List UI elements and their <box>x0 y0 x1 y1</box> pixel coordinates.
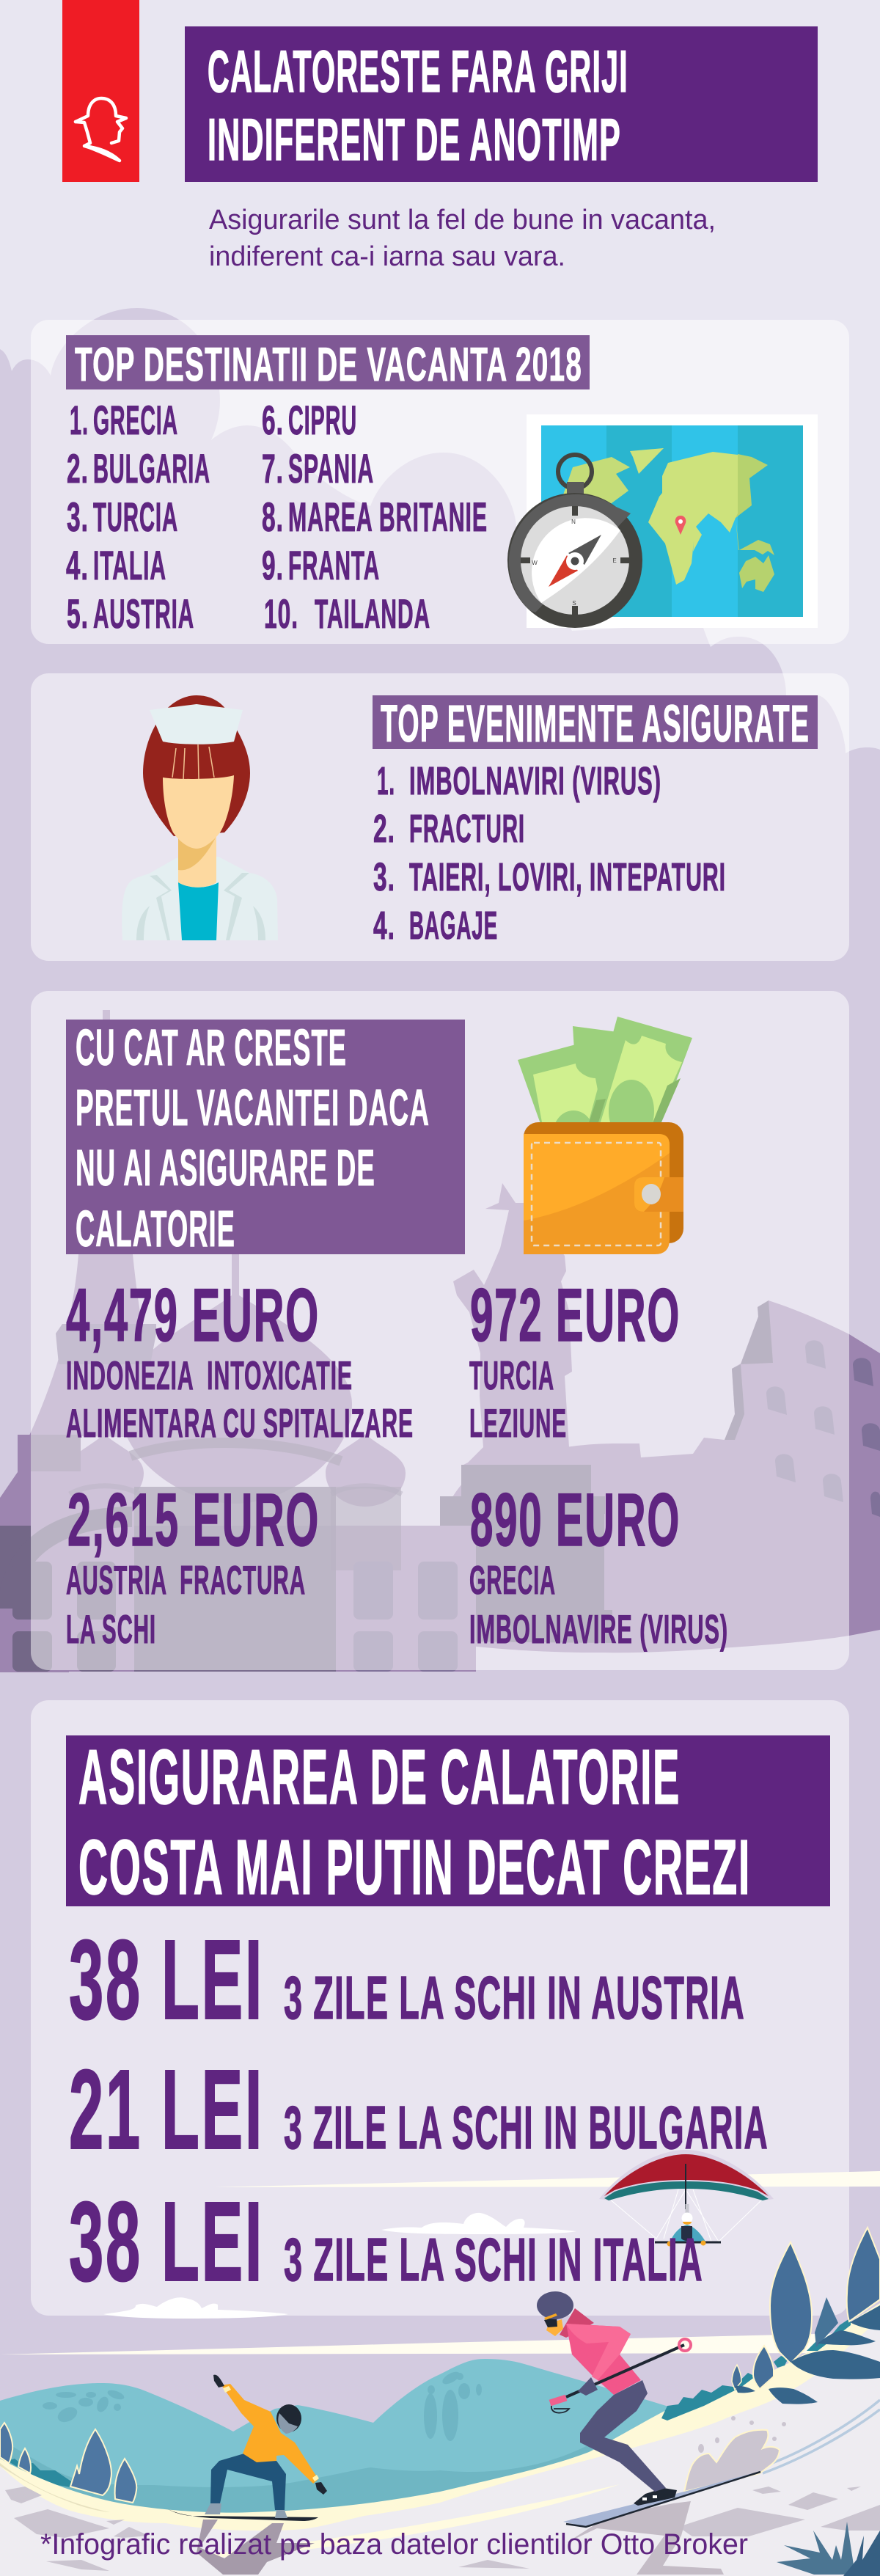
list: destinatii column 2: SPANIA <box>288 445 374 491</box>
ground patches <box>5 2487 880 2571</box>
list: destinatii column 1: 2. <box>67 445 89 491</box>
agave plant <box>777 2522 880 2576</box>
city silhouettes: Moscow, Liberty, Colosseum <box>0 1010 880 1672</box>
heading: cu cat ar creste: CALATORIE <box>76 1200 235 1257</box>
icon: compass: N <box>571 519 576 525</box>
price row: italia <box>69 2178 703 2305</box>
list: destinatii column 1: AUSTRIA <box>93 590 194 637</box>
list: evenimente: BAGAJE <box>409 904 498 948</box>
list: destinatii column 2: 9. <box>262 542 284 588</box>
heading: asigurarea de calatorie <box>66 1734 830 1911</box>
list: destinatii column 1: 1. <box>70 397 89 443</box>
silhouette: cathedral <box>0 1010 476 1672</box>
shadow: snowboarder <box>197 2520 315 2575</box>
figure: hang glider <box>599 2150 774 2246</box>
icon: man with hat logo <box>76 98 126 161</box>
heading: cu cat ar creste: CU CAT AR CRESTE <box>76 1019 347 1076</box>
title <box>185 26 818 182</box>
stat: indonezia: ALIMENTARA CU SPITALIZARE <box>66 1400 414 1446</box>
stat: turcia: 972 EURO <box>470 1273 681 1357</box>
list: destinatii column 1: 5. <box>67 590 89 637</box>
list: evenimente: FRACTURI <box>409 807 525 851</box>
subtitle: indiferent ca-i iarna sau vara. <box>209 241 565 272</box>
list: evenimente: 2. <box>373 807 395 851</box>
snow splash and ski tracks <box>684 2400 880 2492</box>
list: destinatii column 1: 4. <box>66 542 89 588</box>
stat: turcia: TURCIA <box>469 1353 554 1398</box>
stat: austria <box>66 1478 320 1652</box>
list: destinatii column 1: GRECIA <box>93 397 178 443</box>
icon: compass: W <box>532 560 538 566</box>
list: destinatii column 2: TAILANDA <box>315 590 430 637</box>
heading: cu cat ar creste: NU AI ASIGURARE DE <box>76 1139 375 1196</box>
list: evenimente: IMBOLNAVIRI (VIRUS) <box>409 759 661 803</box>
list: destinatii column 1 <box>66 397 210 637</box>
list: evenimente <box>373 759 726 948</box>
illustration: nurse <box>122 695 278 940</box>
panel: costul asigurarii <box>31 1700 849 2316</box>
icon: wallet with money <box>518 1017 692 1254</box>
price row: bulgaria <box>69 2046 769 2173</box>
stat: turcia <box>469 1273 681 1446</box>
list: destinatii column 2: 10. <box>264 590 298 637</box>
list: destinatii column 2 <box>262 397 488 637</box>
grass left <box>7 2459 88 2490</box>
list: evenimente: 3. <box>373 855 395 899</box>
trees left <box>0 2423 136 2503</box>
list: destinatii column 2: MAREA BRITANIE <box>288 494 488 540</box>
panel: top destinatii <box>31 320 849 644</box>
list: destinatii column 2: 8. <box>262 494 284 540</box>
heading: top destinatii <box>66 335 590 391</box>
list: evenimente: 1. <box>377 759 395 803</box>
stat: austria: LA SCHI <box>66 1606 156 1652</box>
stat: grecia: 890 EURO <box>470 1478 681 1562</box>
grass right <box>661 2318 851 2421</box>
icon: world map <box>527 414 818 628</box>
price row: austria: 38 LEI <box>69 1917 264 2043</box>
list: destinatii column 1: TURCIA <box>93 494 178 540</box>
list: destinatii column 1: BULGARIA <box>93 445 210 491</box>
shadow: skier <box>566 2501 724 2575</box>
icon: compass <box>507 455 642 628</box>
icon: compass: E <box>612 557 617 564</box>
stat: grecia <box>469 1478 728 1652</box>
panel: cresterea pretului <box>31 991 849 1670</box>
snow slope <box>0 2303 880 2576</box>
stat: indonezia: INDONEZIA INTOXICATIE <box>66 1353 353 1398</box>
mountains <box>0 2359 733 2553</box>
silhouette: statue of liberty <box>453 1183 586 1466</box>
silhouette: pedestal <box>440 1465 612 1643</box>
sky streaks and clouds <box>0 2171 880 2354</box>
list: destinatii column 2: FRANTA <box>288 542 380 588</box>
subtitle <box>209 205 716 272</box>
icon: compass: S <box>572 600 576 607</box>
stat: grecia: GRECIA <box>469 1557 556 1603</box>
price row: italia: 38 LEI <box>69 2178 264 2305</box>
stat: austria: AUSTRIA FRACTURA <box>66 1557 306 1603</box>
trees right <box>732 2228 880 2404</box>
heading: cu cat ar creste: PRETUL VACANTEI DACA <box>76 1079 430 1136</box>
subtitle: Asigurarile sunt la fel de bune in vacanta, <box>209 205 716 235</box>
panel: top evenimente <box>31 673 849 961</box>
figure: snowboarder <box>166 2375 327 2521</box>
stat: indonezia: 4,479 EURO <box>66 1273 320 1357</box>
figure: skier <box>537 2291 760 2527</box>
stat: indonezia <box>66 1273 414 1446</box>
stat: austria: 2,615 EURO <box>67 1478 320 1562</box>
logo block <box>62 0 139 182</box>
silhouette: colosseum <box>440 1300 880 1653</box>
price row: austria <box>69 1917 745 2043</box>
list: evenimente: 4. <box>373 904 395 948</box>
price row: bulgaria: 21 LEI <box>69 2046 264 2173</box>
list: destinatii column 1: 3. <box>67 494 89 540</box>
list: destinatii column 1: ITALIA <box>93 542 166 588</box>
list: destinatii column 2: 7. <box>262 445 284 491</box>
illustration: ski scene <box>0 2150 880 2576</box>
list: destinatii column 2: 6. <box>262 397 284 443</box>
heading: cu cat ar creste <box>66 1019 465 1257</box>
footnote: *Infografic realizat pe baza datelor clientilor Otto Broker <box>40 2528 748 2561</box>
stat: turcia: LEZIUNE <box>469 1400 567 1446</box>
list: destinatii column 2: CIPRU <box>288 397 357 443</box>
